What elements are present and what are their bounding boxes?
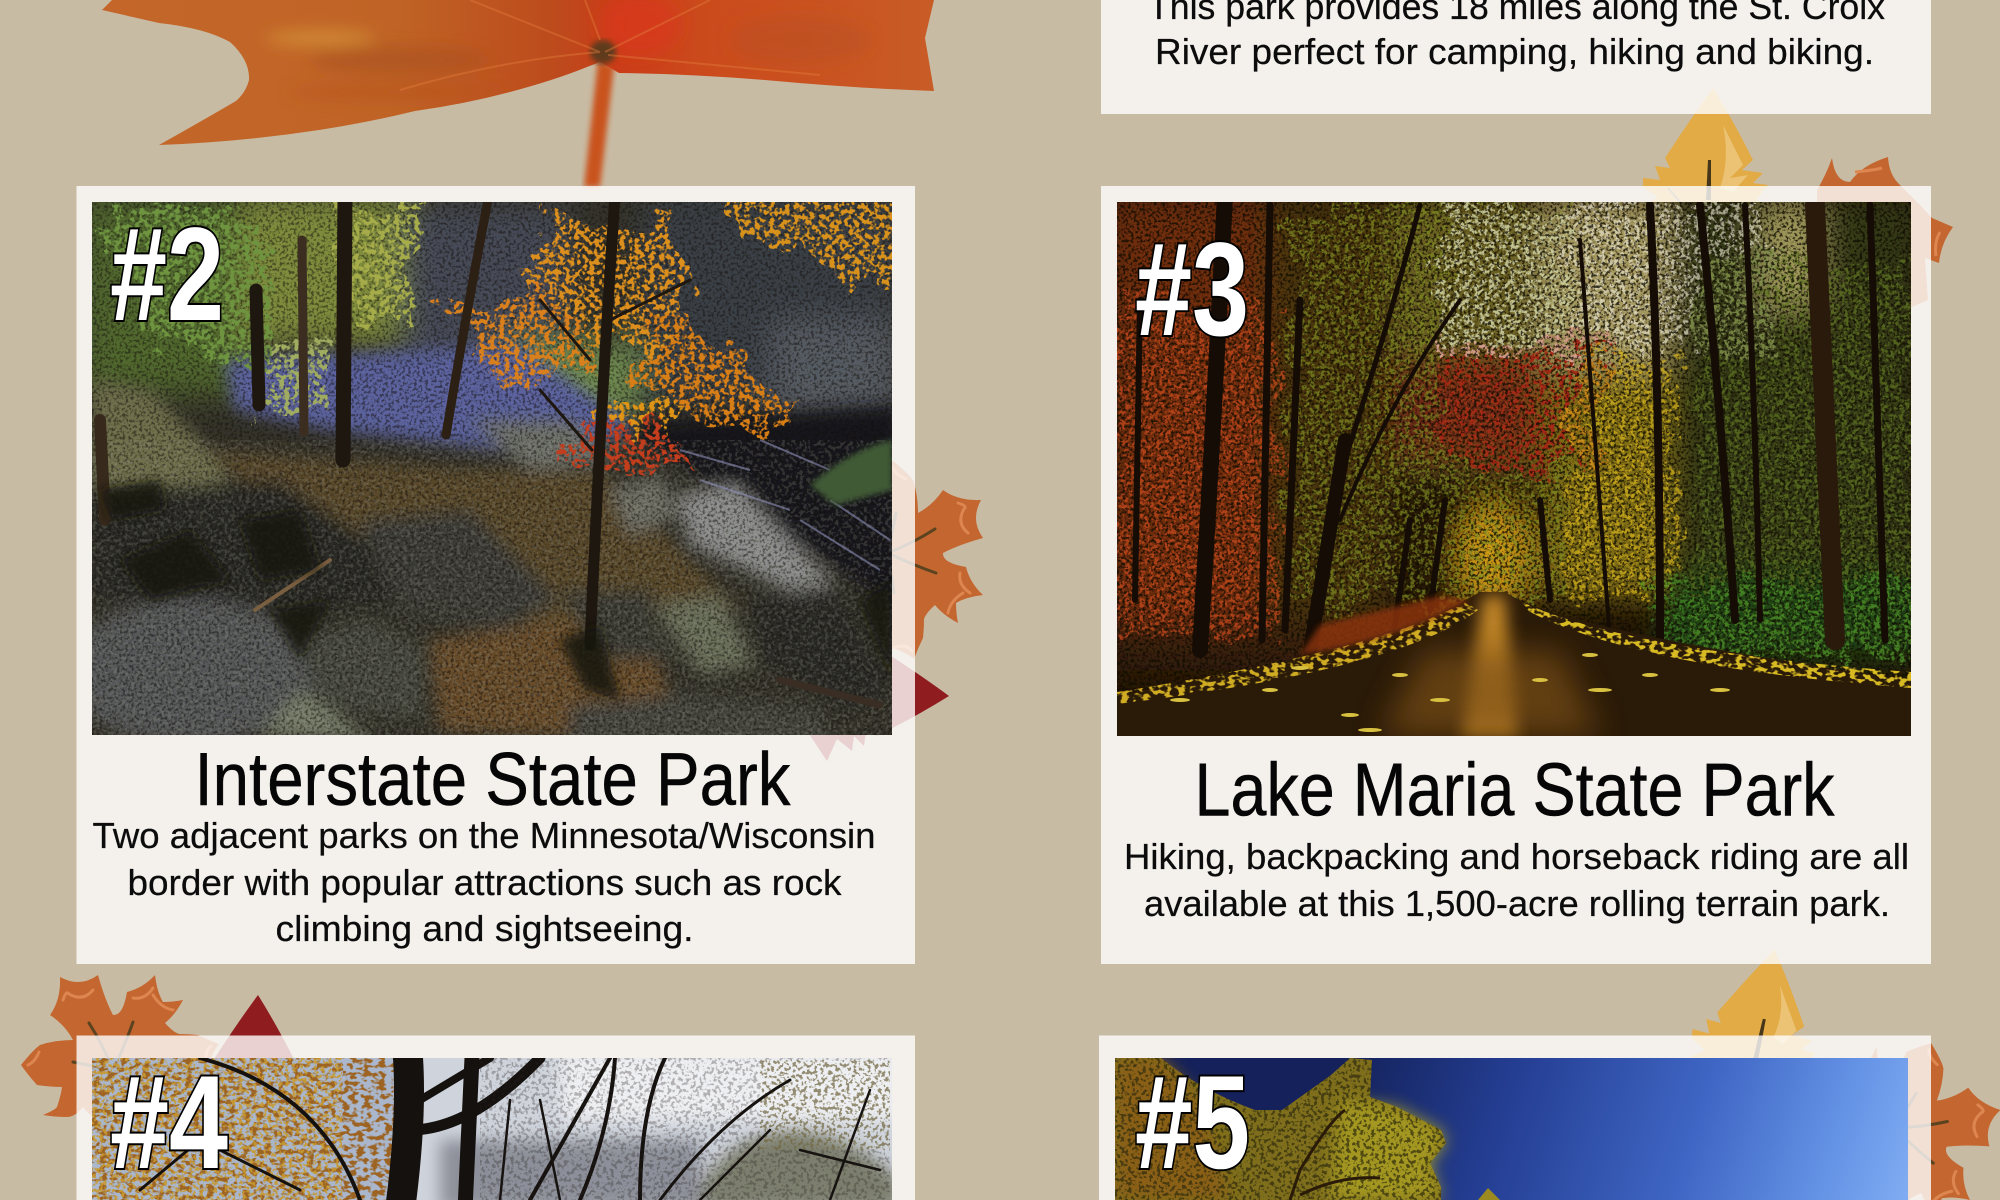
description: Lake Maria State Park [1124,836,1909,924]
description: Lake Maria State Park: available at this 1,500-acre rolling terrain park. [1144,883,1890,924]
number badge: #3: #3 [1135,216,1249,364]
panel: #5 park card [1099,1036,1931,1200]
icon: yellow leaf bottom-right [1678,939,1839,1119]
tree trunks [100,195,880,705]
heading: Interstate State Park: Interstate State Park [194,737,791,821]
description: Interstate State Park: climbing and sightseeing. [276,908,694,949]
icon: yellow leaf above Lake Maria panel [1638,88,1778,250]
foliage [94,202,892,476]
description: Interstate State Park: border with popular attractions such as rock [128,862,843,903]
panel: #3 Lake Maria State Park [1101,186,1931,964]
description: Interstate State Park [92,815,876,949]
photo: Interstate State Park river and rocks [65,195,900,745]
panel: #2 Interstate State Park [65,186,915,964]
road [1117,592,1911,736]
icon: orange leaf bottom-left [21,975,219,1125]
description: St. Croix: River perfect for camping, hiking and biking. [1155,31,1874,72]
panel: top card St. Croix [1101,0,1931,114]
icon: red leaf behind Interstate panel [787,621,949,761]
tree trunks [1135,195,1885,650]
panel: #4 park card [76,1036,915,1200]
icon: orange leaf bottom-right [1807,1023,2000,1200]
description: St. Croix [1148,0,1885,72]
icon: orange leaf beside Lake Maria panel [1817,157,1953,310]
icon: red leaf bottom-left [183,995,323,1157]
foliage specks [1117,300,1277,640]
icon: large orange maple leaf at top [102,0,934,187]
heading: Lake Maria State Park: Lake Maria State Park [1194,748,1835,832]
water streaks [680,440,890,570]
photo: Lake Maria forest road [1105,195,1920,736]
number badge: #4: #4 [110,1049,228,1197]
description: Lake Maria State Park: Hiking, backpacking and horseback riding are all [1124,836,1909,877]
number badge: #5: #5 [1135,1049,1250,1197]
branches [140,1058,880,1200]
photo: bare trees with autumn leaves [85,1050,900,1200]
dark rock cracks [100,480,892,700]
photo: golden tree against blue sky [1115,1058,1908,1200]
icon: orange leaf behind Interstate panel [833,461,983,659]
number badge: #2: #2 [110,201,224,349]
description: Interstate State Park: Two adjacent parks on the Minnesota/Wisconsin [92,815,876,856]
